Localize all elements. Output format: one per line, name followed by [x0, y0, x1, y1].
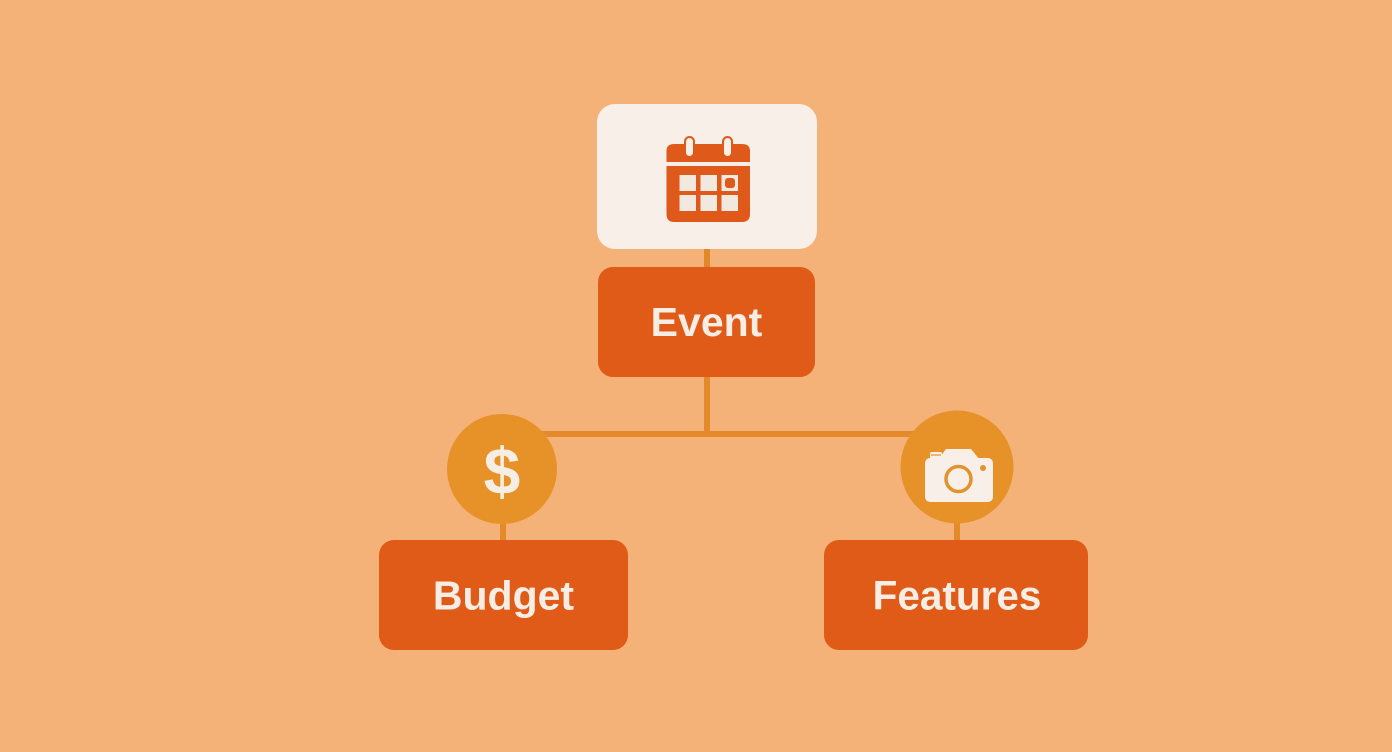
icon: dollar circle: $ [484, 434, 520, 508]
label: Budget: Budget [433, 572, 574, 618]
panel: calendar card [597, 104, 817, 249]
icon: calendar [666, 137, 750, 222]
icon: camera [925, 449, 993, 502]
icon: dollar circle [447, 414, 557, 524]
panel: Budget [379, 540, 628, 650]
label: Event: Event [651, 299, 763, 345]
icon: camera circle [900, 410, 1014, 524]
label: Features: Features [873, 572, 1041, 618]
panel: Event [598, 267, 815, 377]
connector tree: Event to Budget and Features [500, 374, 960, 544]
panel: Features [824, 540, 1088, 650]
connector: calendar card to Event [704, 246, 710, 270]
